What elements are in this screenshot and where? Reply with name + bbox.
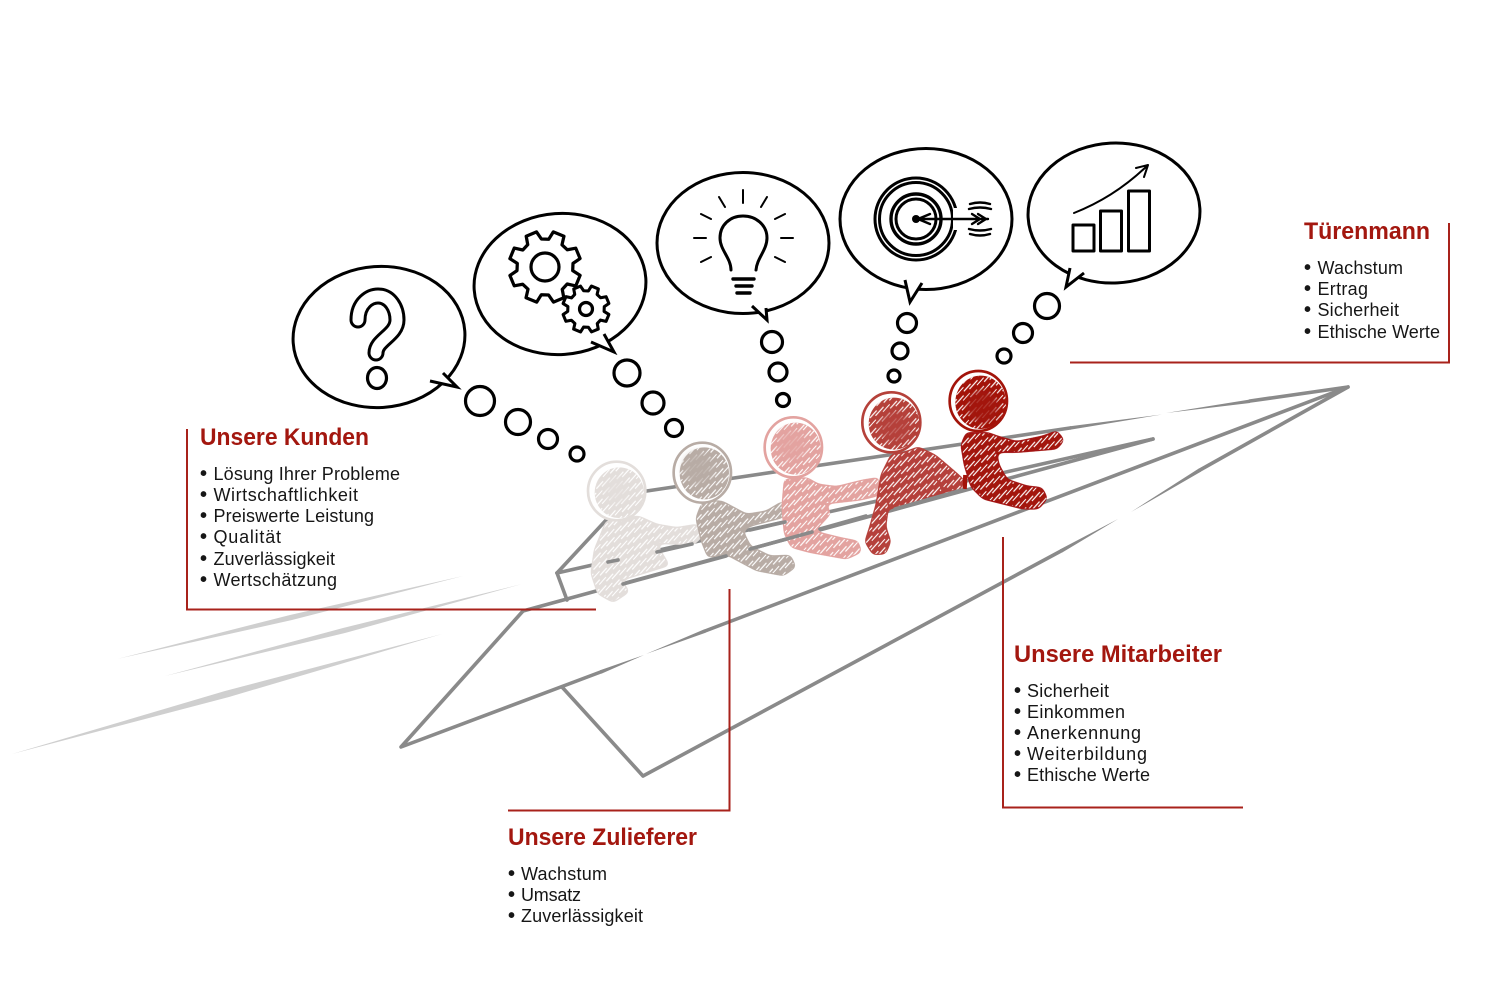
speech bubble: gears: [469, 208, 651, 360]
list: Kunden: Qualität: [214, 527, 281, 547]
list: Türenmann: •: [1304, 278, 1311, 300]
icon: growth chart: [1073, 165, 1150, 251]
plane edges in front of figures: [608, 490, 962, 584]
speech bubble: target: [840, 148, 1012, 302]
list: Mitarbeiter: Weiterbildung: [1027, 744, 1147, 764]
speech bubble: question: [288, 261, 470, 413]
list: Türenmann: Ethische Werte: [1318, 322, 1440, 342]
list: Mitarbeiter: •: [1014, 701, 1021, 723]
figure 3: employee pink: [765, 417, 878, 558]
list: Türenmann: Sicherheit: [1318, 300, 1399, 320]
list: Kunden: •: [200, 505, 207, 527]
list: Türenmann: •: [1304, 321, 1311, 343]
list: Zulieferer: •: [508, 905, 515, 927]
list: Mitarbeiter: •: [1014, 722, 1021, 744]
paper plane: [401, 387, 1348, 776]
figure 1: customer: [588, 462, 702, 602]
list: Zulieferer: Zuverlässigkeit: [521, 906, 643, 926]
list: Mitarbeiter: Einkommen: [1027, 702, 1125, 722]
list: Türenmann: •: [1304, 257, 1311, 279]
speech bubble: idea: [657, 172, 829, 320]
list: Mitarbeiter: •: [1014, 680, 1021, 702]
list: Mitarbeiter: •: [1014, 743, 1021, 765]
list: Kunden: •: [200, 569, 207, 591]
list: Zulieferer: Wachstum: [521, 864, 607, 884]
panel: Türenmann: [1070, 218, 1449, 362]
thought circles: growth: [997, 294, 1060, 363]
list: Mitarbeiter: Anerkennung: [1027, 723, 1141, 743]
thought circles: idea: [762, 332, 790, 406]
panel: Unsere Zulieferer: [508, 589, 730, 927]
list: Kunden: [200, 463, 400, 591]
figures on the plane: [588, 371, 1063, 602]
panel: Unsere Mitarbeiter: [1003, 537, 1243, 808]
list: Mitarbeiter: Sicherheit: [1027, 681, 1109, 701]
list: Mitarbeiter: [1014, 680, 1150, 786]
list: Kunden: •: [200, 463, 207, 485]
heading: Türenmann: Türenmann: [1304, 218, 1430, 245]
heading: Unsere Kunden: Unsere Kunden: [200, 424, 369, 451]
list: Kunden: Wirtschaftlichkeit: [214, 485, 358, 505]
figure 2: supplier: [674, 443, 795, 575]
list: Zulieferer: Umsatz: [521, 885, 581, 905]
icon: question mark: [358, 296, 397, 388]
list: Kunden: Preiswerte Leistung: [214, 506, 374, 526]
list: Kunden: •: [200, 548, 207, 570]
list: Türenmann: •: [1304, 299, 1311, 321]
figure 4: employee red: [862, 392, 963, 554]
list: Kunden: •: [200, 526, 207, 548]
thought circles: gears: [614, 360, 682, 436]
figure 5: Türenmann: [950, 371, 1063, 508]
list: Kunden: Lösung Ihrer Probleme: [214, 464, 400, 484]
list: Mitarbeiter: •: [1014, 764, 1021, 786]
thought circles: question: [466, 386, 584, 461]
icon: target with arrow: [875, 178, 991, 260]
list: Türenmann: Ertrag: [1318, 279, 1368, 299]
list: Türenmann: Wachstum: [1318, 258, 1403, 278]
icon: gears: [498, 220, 616, 339]
list: Zulieferer: [508, 863, 643, 927]
icon: light bulb: [694, 190, 793, 293]
speed lines: [12, 576, 522, 754]
list: Türenmann: [1304, 257, 1440, 343]
heading: Unsere Zulieferer: Unsere Zulieferer: [508, 824, 697, 851]
list: Kunden: Zuverlässigkeit: [214, 549, 335, 569]
speech bubble: growth: [1024, 139, 1204, 287]
list: Kunden: Wertschätzung: [214, 570, 337, 590]
list: Mitarbeiter: Ethische Werte: [1027, 765, 1150, 785]
list: Zulieferer: •: [508, 863, 515, 885]
list: Zulieferer: •: [508, 884, 515, 906]
thought circles: target: [888, 314, 916, 382]
list: Kunden: •: [200, 484, 207, 506]
panel: Unsere Kunden: [187, 424, 596, 610]
heading: Unsere Mitarbeiter: Unsere Mitarbeiter: [1014, 641, 1222, 668]
